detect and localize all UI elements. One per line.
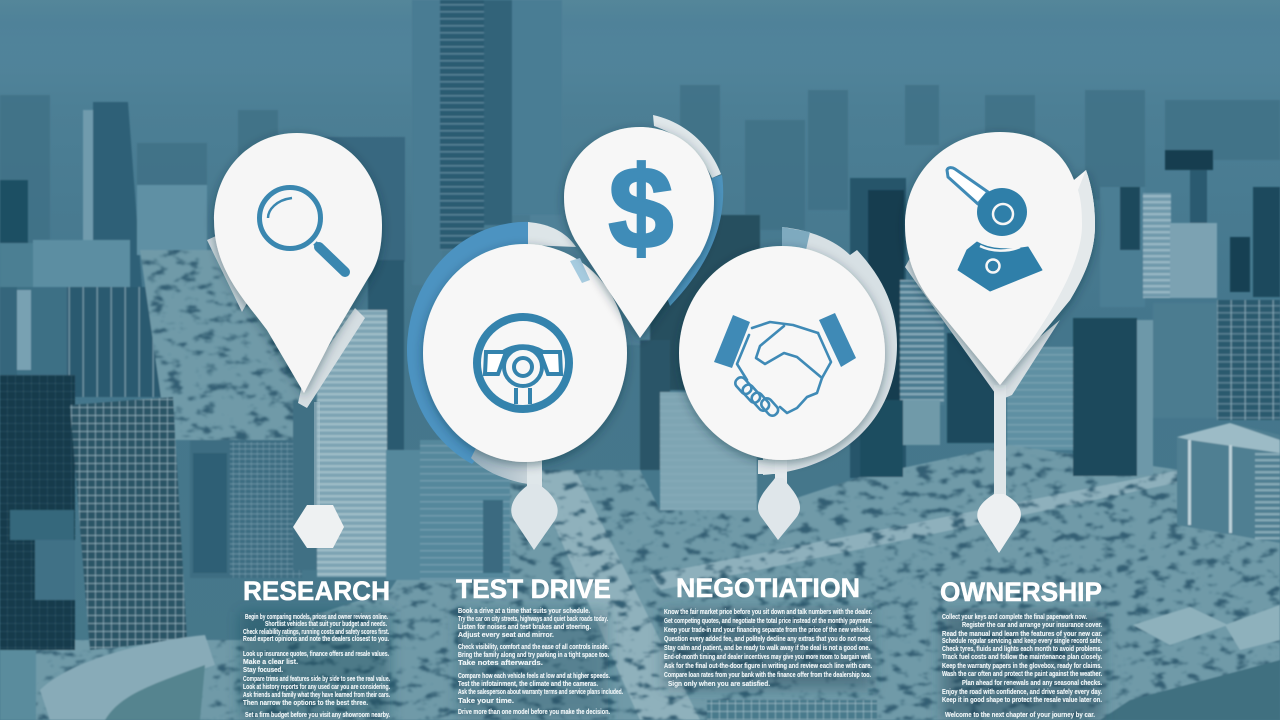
text block: ownership: Check tyres, fluids and lights each month to avoid problems. [942,644,1102,653]
progress ring lower grey [471,440,530,484]
central towers top [412,0,562,285]
step 2: test drive circle [407,222,627,550]
text block: test drive: Drive more than one model before you make the decision. [458,707,610,716]
text block: negotiation: Compare loan rates from your bank with the finance offer from the dealership too. [664,670,871,679]
text block: negotiation: Stay calm and patient, and be ready to walk away if the deal is not a good one. [664,643,870,652]
heading: negotiation: NEGOTIATION [676,573,860,603]
step 1: research pin [207,133,382,548]
connector stem [527,458,542,490]
text block: research: Set a firm budget before you visit any showroom nearby. [245,710,390,719]
text block: research: Make a clear list. [243,657,298,666]
text block: test drive: Take notes afterwards. [458,658,543,667]
text block: research: Look at history reports for any used car you are considering. [243,682,390,691]
test drive marker drop [511,484,558,550]
text block: test drive [458,606,623,716]
text block: research: Ask friends and family what they have learned from their cars. [243,690,390,699]
text block: research: Compare trims and features side by side to see the real value. [243,674,390,683]
text block: research [243,612,390,719]
text block: ownership: Keep the warranty papers in the glovebox, ready for claims. [942,661,1102,670]
text block: research: Shortlist vehicles that suit your budget and needs. [265,619,387,628]
step 3: price pin [564,115,723,338]
icon: dollar sign: $ [609,143,673,273]
text block: negotiation [664,607,872,688]
connector stem [775,458,787,488]
ownership teardrop pin [905,132,1095,385]
text block: research: Stay focused. [243,665,283,674]
connector stem [314,402,320,507]
research marker hexagon [293,505,344,548]
progress ring blue tip [782,227,810,250]
paper fold behind ownership pin [905,258,1060,400]
step 5: ownership pin [905,132,1095,553]
text block: ownership: Read the manual and learn the features of your new car. [942,629,1102,638]
heading: test drive: TEST DRIVE [456,574,611,604]
text block: test drive: Take your time. [458,696,514,705]
text block: ownership: Plan ahead for renewals and any seasonal checks. [962,678,1102,687]
paper fold behind disc [763,227,897,475]
icon: key and person [947,168,1042,291]
text block: test drive: Book a drive at a time that suits your schedule. [458,606,590,615]
text block: ownership: Schedule regular servicing and keep every single record safe. [942,636,1102,645]
text block: test drive: Listen for noises and test brakes and steering. [458,622,591,631]
icon: handshake [714,313,856,418]
paper fold right [298,308,365,408]
text block: ownership: Register the car and arrange your insurance cover. [962,620,1102,629]
text block: negotiation: Ask for the final out-the-door figure in writing and review each line with care. [664,661,872,670]
step 4: negotiation circle [679,227,897,540]
side band [1004,170,1095,380]
research teardrop pin [214,133,382,393]
paper fold left [207,236,247,312]
text block: test drive: Try the car on city streets, highways and quiet back roads today. [458,614,608,623]
text block: test drive: Ask the salesperson about warranty terms and service plans included. [458,687,623,696]
ownership marker drop [977,494,1021,553]
progress ring top grey [528,222,576,247]
text block: negotiation: Question every added fee, and politely decline any extras that you do not need. [664,634,872,643]
text block: negotiation: Keep your trade-in and your financing separate from the price of the new vehicle. [664,625,870,634]
text block: test drive: Test the infotainment, the climate and the cameras. [458,679,598,688]
small blue mark [570,258,590,283]
text block: research: Then narrow the options to the best three. [243,698,368,707]
text block: ownership: Collect your keys and complete the final paperwork now. [942,612,1087,621]
price teardrop pin [564,127,714,338]
pin back grey arc [653,115,721,178]
text block: negotiation: Know the fair market price before you sit down and talk numbers with the dealer. [664,607,872,616]
text block: ownership: Keep it in good shape to protect the resale value later on. [942,695,1102,704]
icon: steering wheel [477,317,569,409]
text block: negotiation: End-of-month timing and dealer incentives may give you more room to bargain well. [664,652,872,661]
icon: magnifying glass [260,188,345,272]
text block: negotiation: Get competing quotes, and negotiate the total price instead of the monthly payment. [664,616,872,625]
text block: test drive: Bring the family along and try parking in a tight space too. [458,650,609,659]
heading: ownership: OWNERSHIP [940,577,1102,607]
text block: research: Read expert opinions and note the dealers closest to you. [243,634,389,643]
text block: research: Check reliability ratings, running costs and safety scores first. [243,627,389,636]
pin back blue arc [664,175,723,306]
text block: research: Look up insurance quotes, finance offers and resale values. [243,649,389,658]
text block: test drive: Adjust every seat and mirror. [458,630,554,639]
text block: negotiation: Sign only when you are satisfied. [668,679,770,688]
connector stem [994,385,1006,503]
text block: test drive: Compare how each vehicle feels at low and at higher speeds. [458,671,610,680]
text block: research: Begin by comparing models, prices and owner reviews online. [245,612,388,621]
connector block [758,460,776,474]
text block: ownership: Wash the car often and protect the paint against the weather. [942,669,1102,678]
heading: research: RESEARCH [243,576,390,606]
text block: ownership: Enjoy the road with confidence, and drive safely every day. [942,687,1102,696]
text block: ownership: Welcome to the next chapter of your journey by car. [945,710,1095,719]
text block: ownership [942,612,1102,719]
negotiation disc [679,246,885,460]
progress ring blue [407,222,530,464]
negotiation marker drop [758,478,800,540]
text block: ownership: Track fuel costs and follow the maintenance plan closely. [942,652,1102,661]
text block: test drive: Check visibility, comfort and the ease of all controls inside. [458,642,609,651]
test drive disc [423,244,627,462]
